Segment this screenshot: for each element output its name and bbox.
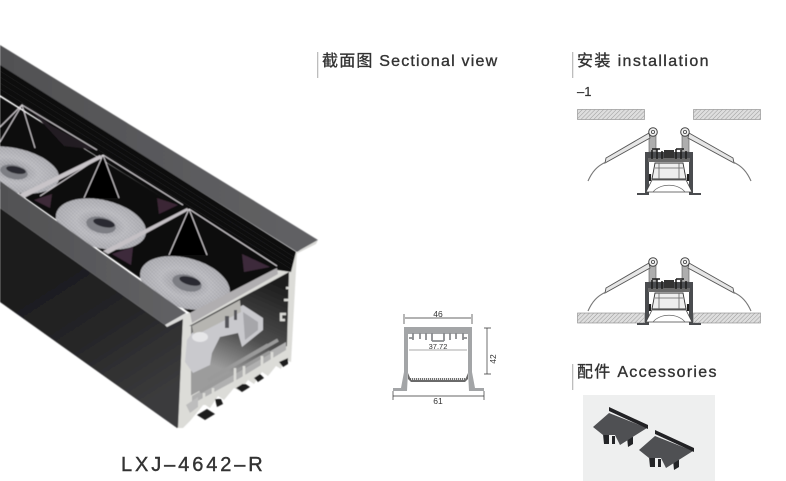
heading: installation [572, 52, 710, 78]
accessories photo: end caps [583, 395, 715, 481]
optic bracket [185, 305, 263, 373]
reflector cell 3 [103, 208, 277, 319]
product photo: recessed linear light [0, 45, 318, 428]
top outer flange [0, 45, 318, 252]
sectional drawing with dimensions [393, 309, 498, 406]
louvre cavity [0, 97, 277, 313]
end cross-section [178, 252, 297, 428]
installation diagram step 1 [578, 110, 760, 195]
sectional drawing with dimensions: 37.72 [429, 342, 447, 351]
heading: accessories: 配件 Accessories [577, 363, 718, 381]
sectional drawing with dimensions: 46 [433, 309, 443, 319]
body side face [0, 208, 184, 428]
model label: LXJ–4642–R [121, 454, 266, 476]
installation diagram step 2 [578, 258, 760, 325]
reflector lip [190, 268, 278, 323]
sectional drawing with dimensions: 61 [433, 396, 443, 406]
step label: –1 [577, 84, 591, 99]
front outer flange [0, 181, 186, 325]
heading: sectional view: 截面图 Sectional view [322, 52, 498, 70]
reflector cell 2 [18, 155, 183, 258]
sectional drawing with dimensions: 42 [488, 354, 498, 364]
heading: installation: 安装 installation [577, 52, 710, 70]
reflector cell 1 [0, 105, 97, 201]
ribbed dark band [0, 65, 296, 272]
